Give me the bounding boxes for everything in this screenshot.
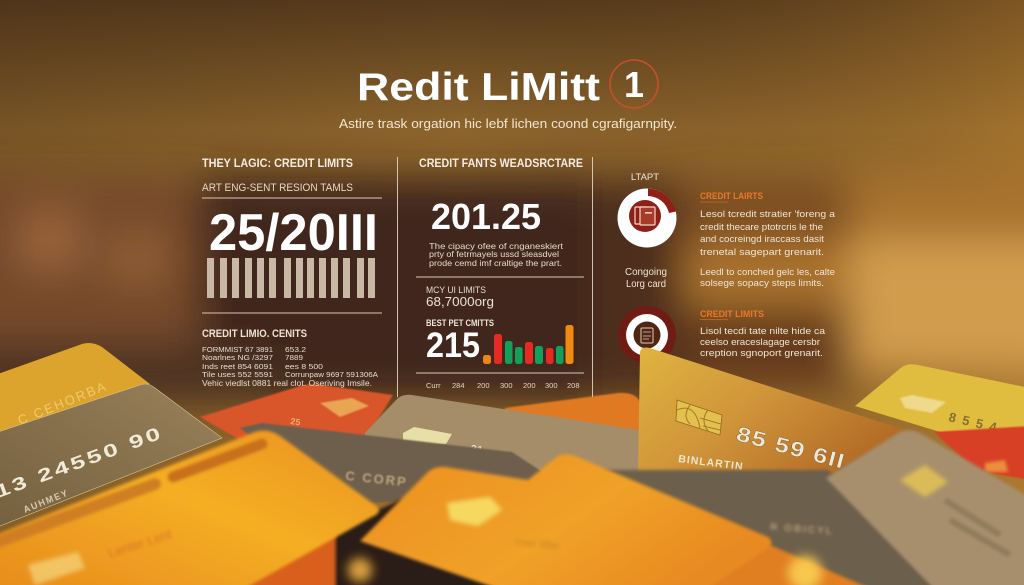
subheading: ART ENG-SENT RESION TAMLS (202, 182, 353, 194)
data rows (202, 345, 378, 388)
chart axis labels: Curr (426, 381, 441, 390)
card: centre orange with chip: coer tiller (515, 536, 561, 553)
stat: limits: 68,7000org (426, 294, 494, 309)
card: grey wide card (240, 423, 570, 505)
description: prode cemd imf craltige the prart. (429, 258, 562, 268)
chart axis labels: 300 (545, 381, 558, 390)
data rows: Noarlnes NG /3297 (202, 353, 273, 362)
note: credit limits one: Lesol tcredit stratier 'foreng a (700, 209, 836, 220)
panel: right column icons and notes (618, 172, 836, 364)
card: orange lower strip with glow dot: R OBICYL (770, 522, 834, 537)
note: short paragraph: Leedl to conched gelc les, calte (700, 267, 835, 278)
data rows: ees 8 500 (285, 362, 323, 371)
description: The cipacy ofee of cnganeskiert (429, 241, 564, 251)
title badge: number 1 in circle: 1 (624, 64, 644, 105)
card: tan with chip (365, 395, 640, 480)
big number: 25/20III (209, 204, 378, 262)
note: short paragraph (700, 267, 835, 289)
barcode bars (207, 258, 375, 298)
note: credit limits two (700, 309, 826, 359)
data rows: 653.2 (285, 345, 306, 354)
card: yellow top left: C CEHORBA (16, 378, 109, 428)
title (357, 60, 658, 109)
card: gold centre with chip and number (638, 348, 905, 476)
card: big orange bottom left with stripe (0, 431, 379, 585)
card: taupe with embossed number (0, 384, 222, 528)
title: Redit LiMitt (357, 66, 600, 109)
big figure 201.25: 201.25 (431, 196, 541, 237)
label: congoing: Congoing (625, 267, 667, 278)
data rows: 7889 (285, 353, 303, 362)
card: red orange centre left: 25 (290, 416, 301, 427)
data rows: Inds reet 854 6091 (202, 362, 273, 371)
card: red orange centre left (200, 384, 393, 440)
data rows: FORMMIST 67 3891 (202, 345, 273, 354)
note: credit limits one (700, 191, 836, 258)
chart axis labels: 208 (567, 381, 580, 390)
card: dark back bottom with orange edge (225, 500, 560, 585)
card: centre orange with chip (360, 454, 772, 585)
panel: left column credit limits (202, 158, 382, 388)
stat: limits (426, 285, 494, 309)
card: yellow right: 8 5 5 4 (947, 409, 1000, 435)
heading: credit limio: CREDIT LIMIO. CENITS (202, 328, 307, 340)
chart axis labels: 200 (523, 381, 536, 390)
card: taupe blurred right (826, 430, 1024, 585)
card: red right (934, 426, 1024, 480)
card: orange lower strip with glow dot (640, 520, 885, 585)
data rows: Corrunpaw 9697 591306A (285, 370, 378, 379)
card: gold centre with chip and number: BINLARTIN (678, 453, 744, 473)
column dividers (398, 157, 592, 397)
description: prty of fetrmayels ussd sleasdvel (429, 249, 559, 259)
description (429, 241, 564, 268)
card: yellow right (855, 364, 1024, 435)
bar chart (416, 325, 584, 390)
card: dark grey bottom centre (600, 470, 960, 585)
stat label: BEST PET CMITTS (426, 318, 494, 329)
chart axis labels: 200 (477, 381, 490, 390)
note: short paragraph: solsege sopacy steps limits. (700, 278, 824, 289)
chart axis labels: 300 (500, 381, 513, 390)
icon: donut with document (618, 306, 676, 364)
note: credit limits one: and cocreingd iraccass dasit (700, 234, 824, 245)
note: credit limits two: CREDIT LIMITS (700, 309, 764, 320)
heading: they lagic: THEY LAGIC: CREDIT LIMITS (202, 158, 353, 170)
card stack (0, 343, 1024, 585)
card: taupe with embossed number: AUHMEY (22, 488, 70, 515)
icon: donut with cards (618, 188, 676, 248)
chart axis labels: 284 (452, 381, 465, 390)
data rows: Vehic viedlst 0881 real clot. Oseriving Imsile. (202, 378, 372, 388)
note: credit limits two: creption sgnoport grenarit. (700, 348, 823, 359)
card: yellow top left (0, 343, 150, 445)
label: lorg card: Lorg card (626, 279, 666, 290)
card: big orange bottom left with stripe: Lenter Lent (106, 526, 174, 561)
card: grey wide card: C CORP (345, 468, 408, 490)
title badge: number 1 in circle (610, 60, 658, 108)
heading: credit fants: CREDIT FANTS WEADSRCTARE (419, 158, 583, 170)
subtitle: Astire trask orgation hic lebf lichen coond cgrafigarnpity. (339, 116, 677, 131)
chart axis labels (426, 381, 580, 390)
stat: limits: MCY UI LIMITS (426, 285, 486, 296)
card: tan with chip: 21 (469, 443, 484, 457)
note: credit limits two: Lisol tecdi tate nilte hide ca (700, 326, 826, 337)
note: credit limits two: ceelso eraceslagage cersbr (700, 337, 820, 348)
note: credit limits one: credit thecare ptotrcris le the (700, 222, 823, 233)
data rows: Tile uses 552 5591 (202, 370, 273, 379)
panel: middle column credit fants (416, 158, 584, 390)
card: gold centre with chip and number: 85 59 6II (734, 423, 848, 474)
big figure 215: 215 (426, 326, 480, 365)
card: orange behind top right (505, 393, 640, 440)
note: credit limits one: CREDIT LAIRTS (700, 191, 763, 202)
note: credit limits one: trenetal sagepart grenarit. (700, 247, 824, 258)
label: ltapt: LTAPT (631, 172, 659, 183)
